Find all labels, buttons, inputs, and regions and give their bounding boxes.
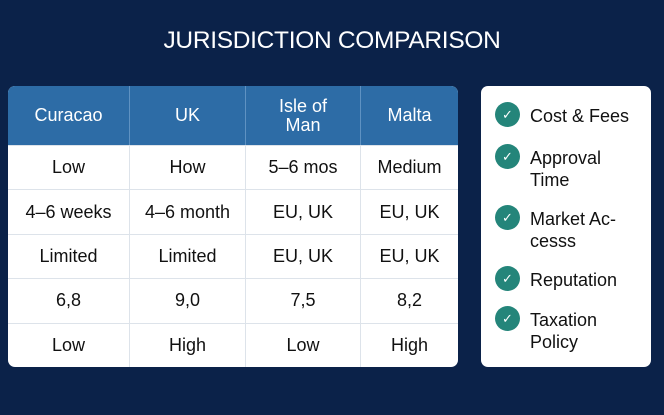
comparison table: Malta	[387, 105, 432, 125]
comparison table: How	[169, 157, 206, 177]
criterion: taxation: ✓	[502, 311, 513, 326]
criterion: cost: Cost & Fees	[530, 106, 629, 126]
comparison table: 5–6 mos	[268, 157, 338, 177]
comparison table: Limited	[158, 246, 217, 266]
criterion: reputation: Reputation	[530, 270, 617, 290]
criterion: market	[495, 205, 616, 251]
comparison table: 6,8	[56, 290, 81, 310]
comparison table: Low	[286, 335, 320, 355]
criterion: market: cesss	[530, 231, 576, 251]
comparison table: Limited	[39, 246, 98, 266]
criterion: market: Market Ac-	[530, 209, 616, 229]
comparison table: Medium	[377, 157, 442, 177]
comparison table: Man	[285, 114, 320, 134]
comparison table	[8, 86, 458, 367]
criterion: cost: ✓	[502, 107, 513, 122]
comparison table: High	[169, 335, 206, 355]
comparison table: Low	[52, 335, 85, 355]
comparison table: EU, UK	[273, 202, 333, 222]
criterion: taxation	[495, 306, 597, 352]
criterion: market: ✓	[502, 210, 513, 225]
comparison table: Low	[52, 157, 85, 177]
comparison table: 7,5	[290, 290, 316, 310]
criterion: approval: Approval	[530, 148, 601, 168]
comparison table: High	[391, 335, 428, 355]
comparison table: 4–6 month	[145, 202, 230, 222]
comparison table: UK	[175, 105, 200, 125]
comparison table: Curacao	[34, 105, 103, 125]
criterion: reputation: ✓	[502, 271, 513, 286]
criterion: approval	[495, 144, 601, 190]
criterion: reputation	[495, 266, 617, 291]
comparison table: EU, UK	[273, 246, 333, 266]
panel: criteria	[481, 86, 651, 367]
title: JURISDICTION COMPARISON	[163, 27, 501, 54]
comparison table: Isle of	[279, 96, 327, 116]
criterion: taxation: Policy	[530, 332, 578, 352]
criterion: cost	[495, 102, 629, 127]
comparison table: 4–6 weeks	[25, 202, 112, 222]
comparison table: EU, UK	[379, 202, 440, 222]
comparison table: EU, UK	[379, 246, 440, 266]
comparison table: 9,0	[175, 290, 200, 310]
comparison table: 8,2	[397, 290, 422, 310]
criterion: approval: ✓	[502, 149, 513, 164]
criterion: taxation: Taxation	[530, 310, 597, 330]
criterion: approval: Time	[530, 170, 569, 190]
